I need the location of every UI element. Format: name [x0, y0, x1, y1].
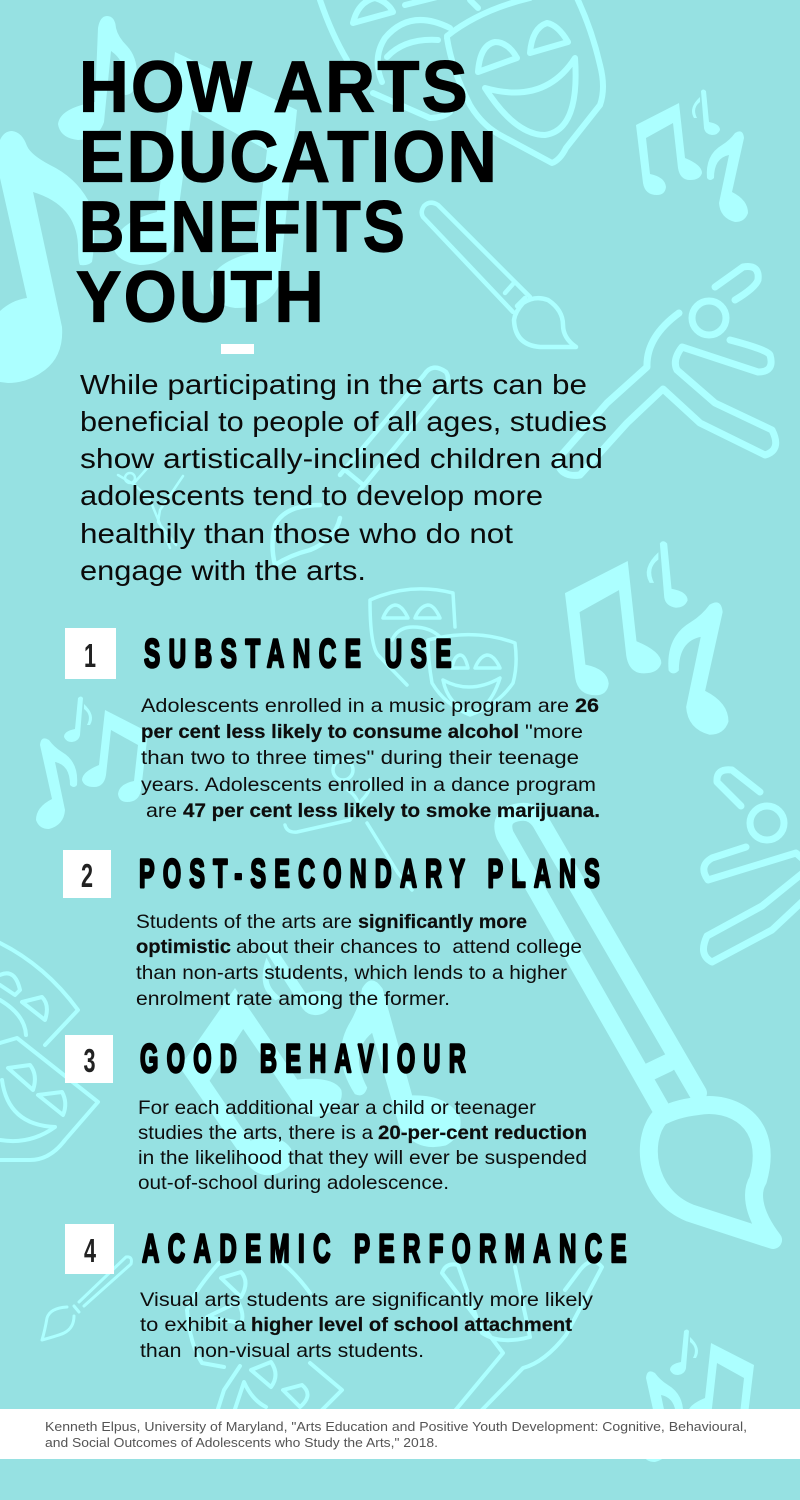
- title: YOUTH: [76, 258, 326, 338]
- panel: post-secondary plans: [63, 850, 608, 1010]
- body text: post-secondary plans: significantly more: [358, 911, 527, 933]
- body text: academic performance: to exhibit a: [140, 1314, 246, 1336]
- heading: substance use: SUBSTANCE USE: [144, 632, 460, 676]
- number badge 2: [63, 850, 111, 898]
- icon: music notes top right: [636, 90, 748, 222]
- icon: tiny dancer behind intro: [118, 465, 183, 548]
- icon: small paintbrush bottom left: [42, 1257, 131, 1340]
- icon: theatre masks left: [0, 942, 98, 1160]
- body text: good behaviour: in the likelihood that they will ever be suspended: [138, 1147, 587, 1169]
- body text: substance use: 47 per cent less likely to smoke marijuana.: [183, 800, 600, 822]
- number badge 4: [65, 1224, 114, 1274]
- intro paragraph: engage with the arts.: [80, 555, 366, 586]
- body text: substance use: 26: [575, 695, 599, 717]
- body text: substance use: are: [146, 800, 177, 822]
- intro paragraph: [80, 369, 607, 586]
- body text: post-secondary plans: enrolment rate among the former.: [136, 988, 450, 1010]
- footer strip with citation: [0, 1409, 800, 1459]
- body text: substance use: [141, 695, 600, 822]
- icon: dancer middle: [285, 760, 412, 890]
- body text: post-secondary plans: about their chances to attend college: [236, 936, 582, 958]
- title: BENEFITS: [79, 188, 407, 268]
- body text: academic performance: higher level of school attachment: [251, 1314, 573, 1336]
- intro paragraph: While participating in the arts can be: [80, 369, 587, 400]
- body text: post-secondary plans: optimistic: [136, 936, 231, 958]
- panel: substance use: [65, 628, 600, 822]
- icon: theatre masks top: [320, 0, 603, 163]
- intro paragraph: healthily than those who do not: [80, 518, 513, 549]
- icon: large music notes centre: [146, 899, 469, 1239]
- body text: substance use: than two to three times" during their teenage: [141, 747, 579, 769]
- title: [76, 48, 499, 338]
- body text: post-secondary plans: than non-arts students, which lends to a higher: [136, 962, 568, 984]
- number badge 3: [65, 1035, 113, 1083]
- title accent bar: [221, 344, 254, 354]
- icon: raised hand figure bottom: [442, 1262, 602, 1412]
- body text: substance use: per cent less likely to consume alcohol: [141, 721, 519, 743]
- title: HOW ARTS: [79, 48, 470, 128]
- icon: paintbrush behind intro: [272, 368, 448, 565]
- body text: good behaviour: studies the arts, there is a: [138, 1122, 373, 1144]
- number badge 4: 4: [84, 1232, 96, 1269]
- number badge 3: 3: [84, 1042, 96, 1079]
- number badge 1: 1: [84, 637, 96, 674]
- body text: academic performance: Visual arts students are significantly more likely: [140, 1289, 593, 1311]
- icon: theatre masks bottom: [187, 1257, 342, 1412]
- footer strip with citation: Kenneth Elpus, University of Maryland, "Arts Education and Positive Youth Development: Cognitive, Behavioural,: [45, 1420, 747, 1434]
- intro paragraph: beneficial to people of all ages, studies: [80, 406, 607, 437]
- heading: good behaviour: GOOD BEHAVIOUR: [140, 1037, 474, 1081]
- icon: theatre masks middle: [370, 589, 516, 715]
- icon: dancer right: [703, 770, 800, 962]
- body text: good behaviour: [138, 1097, 587, 1194]
- body text: academic performance: than non-visual arts students.: [140, 1340, 424, 1362]
- body text: substance use: Adolescents enrolled in a music program are: [141, 695, 569, 717]
- panel: good behaviour: [65, 1035, 587, 1194]
- title: EDUCATION: [79, 118, 499, 198]
- body text: substance use: years. Adolescents enrolled in a dance program: [141, 774, 596, 796]
- icon: large music notes top left: [0, 16, 297, 383]
- body text: good behaviour: For each additional year a child or teenager: [138, 1097, 537, 1119]
- icon: music notes bottom right: [642, 1330, 754, 1462]
- icon: large music notes middle right: [565, 541, 728, 735]
- panel: academic performance: [65, 1224, 635, 1362]
- footer strip with citation: and Social Outcomes of Adolescents who Study the Arts," 2018.: [45, 1436, 438, 1450]
- intro paragraph: show artistically-inclined children and: [80, 443, 603, 474]
- number badge 2: 2: [81, 857, 93, 894]
- body text: good behaviour: 20-per-cent reduction: [378, 1122, 587, 1144]
- body text: academic performance: [140, 1289, 593, 1362]
- body text: substance use: "more: [525, 721, 583, 743]
- body text: post-secondary plans: Students of the arts are: [136, 911, 352, 933]
- number badge 1: [65, 628, 116, 679]
- body text: post-secondary plans: [136, 911, 582, 1010]
- icon: small paintbrush: [422, 203, 576, 347]
- intro paragraph: adolescents tend to develop more: [80, 480, 543, 511]
- icon: music notes left: [36, 696, 148, 829]
- icon: dancer top right: [557, 267, 776, 475]
- body text: good behaviour: out-of-school during adolescence.: [138, 1172, 449, 1194]
- icon: large paintbrush: [503, 812, 773, 1240]
